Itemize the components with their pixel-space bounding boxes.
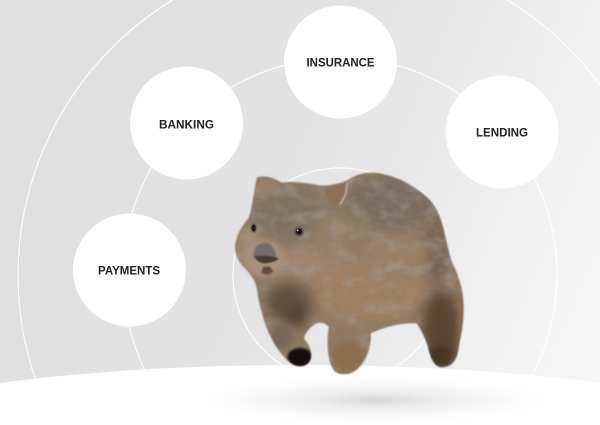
rear leg <box>422 290 462 370</box>
node: insurance: INSURANCE <box>306 56 374 70</box>
fur texture <box>236 178 461 362</box>
chest shadow <box>264 283 312 320</box>
face fur <box>254 190 328 242</box>
snout <box>246 240 284 277</box>
overall tone <box>236 174 460 358</box>
node: lending: LENDING <box>476 126 528 140</box>
node: banking: BANKING <box>159 118 214 132</box>
ground <box>0 365 600 425</box>
node: banking <box>130 66 243 180</box>
nose <box>253 243 277 261</box>
mouth <box>261 267 273 274</box>
front leg <box>270 323 293 351</box>
right ear rim <box>339 183 347 205</box>
ground shadow <box>190 376 560 424</box>
left ear <box>257 178 279 193</box>
front paw <box>287 348 313 367</box>
back fur <box>347 175 440 228</box>
belly fur <box>312 264 426 320</box>
node: payments <box>73 214 186 326</box>
icon: wombat <box>234 172 465 376</box>
eye: left <box>251 223 257 233</box>
middle leg <box>332 340 365 373</box>
node: lending <box>446 76 558 188</box>
eye: right <box>294 227 304 237</box>
node: payments: PAYMENTS <box>98 264 160 278</box>
node: insurance <box>284 6 397 118</box>
right ear <box>323 183 347 207</box>
